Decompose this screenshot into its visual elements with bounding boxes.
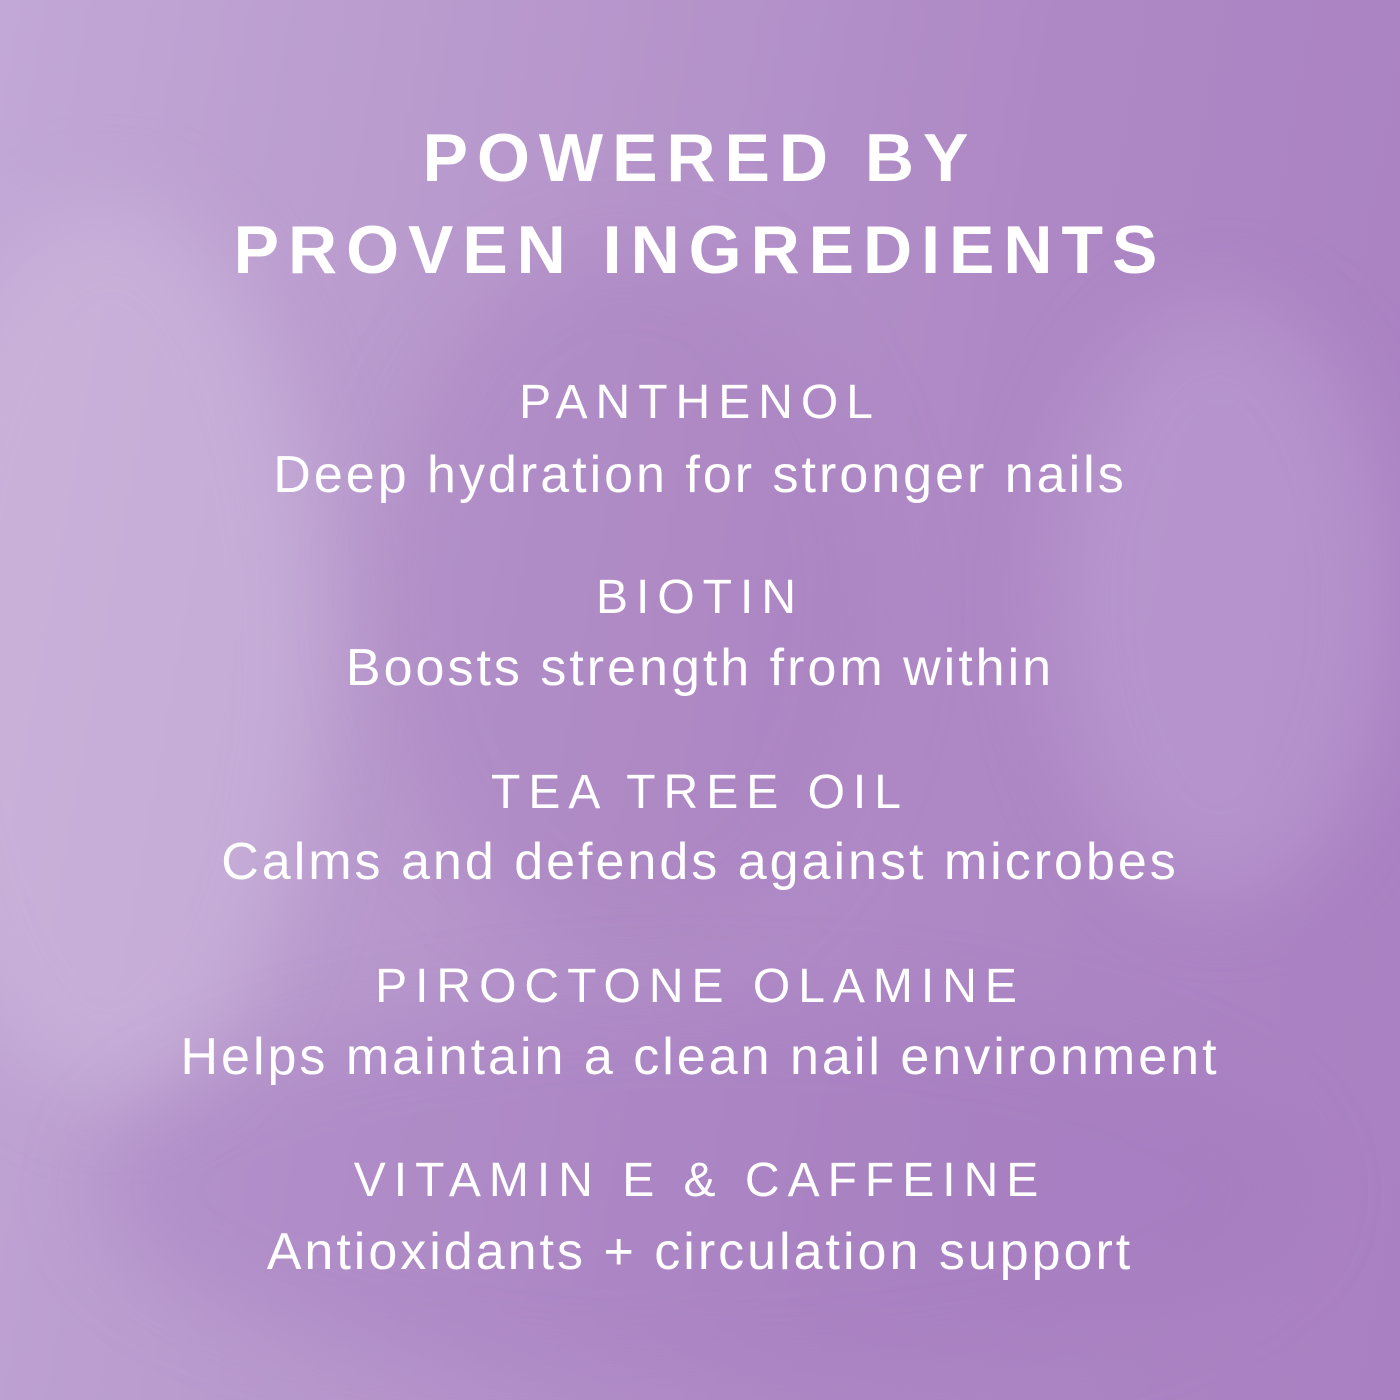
ingredient: vitamin e & caffeine: VITAMIN E & CAFFEINE (354, 1154, 1046, 1207)
title (234, 120, 1166, 288)
ingredient: panthenol (273, 376, 1127, 504)
ingredient: tea tree oil: Calms and defends against microbes (221, 833, 1179, 891)
ingredient: vitamin e & caffeine (266, 1154, 1133, 1281)
ingredient: piroctone olamine (180, 960, 1220, 1086)
title: PROVEN INGREDIENTS (234, 212, 1166, 288)
ingredient: panthenol: Deep hydration for stronger nails (273, 446, 1127, 504)
ingredient: panthenol: PANTHENOL (519, 376, 881, 429)
ingredient: piroctone olamine: Helps maintain a clean nail environment (180, 1028, 1220, 1086)
ingredient: biotin: BIOTIN (596, 571, 804, 624)
ingredient: piroctone olamine: PIROCTONE OLAMINE (375, 960, 1025, 1013)
title: POWERED BY (423, 120, 977, 196)
ingredient: vitamin e & caffeine: Antioxidants + circulation support (267, 1223, 1133, 1281)
ingredient: biotin (346, 571, 1054, 697)
ingredient: tea tree oil: TEA TREE OIL (491, 766, 909, 819)
ingredient: tea tree oil (221, 766, 1179, 891)
ingredient: biotin: Boosts strength from within (346, 639, 1054, 697)
